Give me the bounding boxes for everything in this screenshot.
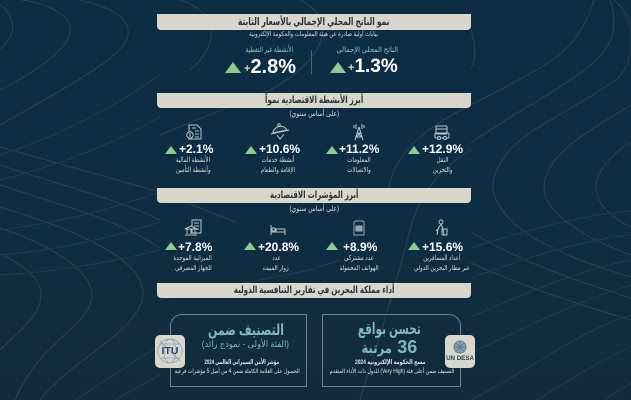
stat: non-oil activities xyxy=(225,44,296,78)
value: +2.8% xyxy=(244,56,296,78)
note: الحصول على العلامة الكاملة ضمن 4 من أصل 5 مؤشرات فرعية xyxy=(174,369,300,375)
label: أنشطة خدمات xyxy=(262,157,294,164)
value: +10.6% xyxy=(259,142,300,156)
heading: competitiveness reports: أداء مملكة البحرين في تقارير التنافسية الدولية xyxy=(234,285,394,296)
icon: antenna tower xyxy=(354,124,364,140)
title: تحسن بواقع xyxy=(358,321,420,338)
label: GDP: الناتج المحلي الإجمالي xyxy=(336,45,398,54)
index name: مؤشر الأمن السيبراني العالمي 2024 xyxy=(205,359,279,366)
label xyxy=(261,155,295,174)
label xyxy=(174,255,212,272)
icon: bed xyxy=(270,225,286,235)
title: التصنيف ضمن xyxy=(208,322,284,339)
item: hotel guests xyxy=(244,225,299,272)
label: عدد xyxy=(272,255,280,262)
label: الأنشطة المالية xyxy=(176,157,210,164)
label: والاتصالات xyxy=(347,167,371,174)
value: +20.8% xyxy=(258,240,299,254)
label: وأنشطة التأمين xyxy=(176,167,210,174)
subtitle: (الفئة الأولى - نموذج رائد) xyxy=(201,339,289,349)
value: +15.6% xyxy=(422,240,463,254)
label xyxy=(433,157,453,174)
label xyxy=(414,253,470,272)
heading: GDP growth xyxy=(157,14,471,30)
label xyxy=(263,255,289,272)
value: +1.3% xyxy=(348,56,398,77)
label: أعداد المسافرين xyxy=(423,255,461,262)
label: عبر مطار البحرين الدولي xyxy=(414,265,470,272)
label: للجهاز المصرفي xyxy=(175,265,211,272)
note: التصنيف ضمن أعلى فئة (Very High) للدول ذات الأداء المتقدم xyxy=(330,369,454,375)
value: +2.1% xyxy=(179,142,213,156)
subheading: yoy: (على أساس سنوي) xyxy=(289,109,339,118)
item: hospitality xyxy=(245,123,300,174)
icon: cloche xyxy=(270,123,290,140)
label: المعلومات xyxy=(347,157,371,164)
label: non-oil: الأنشطة غير النفطية xyxy=(245,45,293,54)
heading: competitiveness reports xyxy=(157,283,471,298)
label: عدد مشتركي xyxy=(344,255,374,262)
triangle xyxy=(165,146,177,154)
heading: top growing activities: أبرز الأنشطة الاقتصادية نمواً xyxy=(265,95,363,106)
item: ICT xyxy=(326,124,380,174)
heading: GDP growth: نمو الناتج المحلي الإجمالي بالأسعار الثابتة xyxy=(238,16,390,28)
icon: ITU logo xyxy=(155,335,185,368)
label: الميزانية الموحدة xyxy=(174,255,212,262)
rank: مرتبة xyxy=(361,340,392,357)
value: +12.9% xyxy=(422,142,463,156)
icon: UN DESA logo xyxy=(445,335,475,368)
triangle xyxy=(245,146,257,154)
heading: top growing activities xyxy=(157,93,471,108)
icon: SIM card xyxy=(354,220,364,236)
subheading: yoy: (على أساس سنوي) xyxy=(289,204,339,213)
label: الهواتف المحمولة xyxy=(339,265,379,272)
divider xyxy=(311,50,312,74)
triangle xyxy=(326,242,338,250)
triangle xyxy=(408,242,420,250)
icon: up triangle xyxy=(225,62,241,73)
triangle xyxy=(244,242,256,250)
stat: GDP xyxy=(330,45,398,77)
ITU text: ITU xyxy=(162,345,178,357)
icon: traveller xyxy=(436,220,448,236)
label xyxy=(347,157,371,174)
subheading: data source: بيانات أولية صادرة عن هيئة المعلومات والحكومة الإلكترونية xyxy=(250,31,378,38)
label: النقل xyxy=(437,157,449,164)
value: +8.9% xyxy=(343,240,377,254)
item: bank budget xyxy=(165,220,212,272)
heading: top indicators: أبرز المؤشرات الاقتصادية xyxy=(270,190,358,201)
panel: UN e-government ranking xyxy=(322,314,461,387)
rank xyxy=(361,337,417,357)
label: الإقامة والطعام xyxy=(261,167,295,174)
item: mobile subscribers xyxy=(326,220,379,272)
icon: up triangle xyxy=(330,62,346,73)
label: والتخزين xyxy=(433,167,453,174)
icon: truck and box xyxy=(434,126,450,140)
value: +7.8% xyxy=(178,240,212,254)
UN DESA text: UN DESA xyxy=(446,355,474,362)
index name: مسح الحكومة الإلكترونية 2024 xyxy=(355,359,425,366)
item: airport passengers xyxy=(408,220,470,272)
item: financial xyxy=(165,124,214,174)
label: زوار المبيت xyxy=(263,265,289,272)
triangle xyxy=(326,146,338,154)
item: transport xyxy=(408,126,463,174)
icon: finance document xyxy=(186,124,202,140)
heading: top indicators xyxy=(157,188,471,203)
value: +11.2% xyxy=(339,142,379,156)
triangle xyxy=(408,146,420,154)
triangle xyxy=(165,242,177,250)
label xyxy=(339,254,379,272)
icon: bank and document xyxy=(184,220,202,236)
label xyxy=(176,155,210,174)
panel: ITU ranking xyxy=(170,314,307,387)
rank: 36 xyxy=(397,337,417,357)
